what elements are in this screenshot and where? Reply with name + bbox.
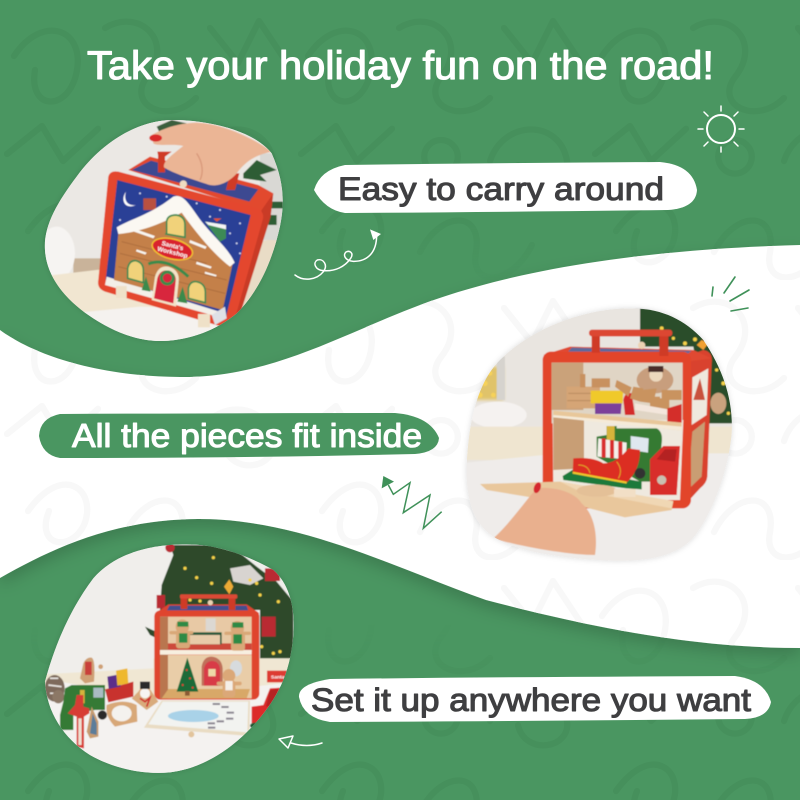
white wave band bbox=[0, 245, 800, 658]
handle posts bbox=[157, 152, 172, 172]
gingerbread bbox=[217, 669, 242, 697]
arrow: small white left arrow bbox=[279, 736, 322, 748]
ice rink board bbox=[144, 701, 250, 736]
santa figure bbox=[80, 658, 94, 683]
photo: closed carry case held by hand bbox=[44, 120, 284, 342]
icon: sun bbox=[698, 106, 744, 152]
arrow: curly white arrow bbox=[295, 229, 381, 279]
photo: open case with pieces stored inside bbox=[460, 300, 740, 570]
shelf bbox=[553, 410, 682, 427]
arrow: green zigzag arrow bbox=[382, 476, 442, 528]
red sleigh bbox=[252, 688, 282, 723]
hand bbox=[152, 123, 272, 185]
photo: set up with toys around bbox=[44, 544, 294, 774]
handle bbox=[592, 333, 668, 356]
case bbox=[155, 604, 259, 613]
case side bbox=[690, 350, 713, 498]
case side bbox=[235, 194, 274, 314]
case frame bbox=[544, 346, 698, 356]
photo: set up with toys around: Santa bbox=[271, 674, 285, 680]
lower train and sleigh bbox=[597, 426, 662, 482]
gingerbread house bbox=[114, 202, 233, 310]
upper shelf toys bbox=[567, 387, 600, 408]
toy train bbox=[60, 685, 105, 730]
penguin bbox=[87, 707, 98, 738]
pill: set it up anywhere you want bbox=[299, 676, 771, 722]
handle bbox=[181, 597, 235, 610]
tree bbox=[160, 545, 293, 658]
polar bear bbox=[106, 702, 137, 727]
pill: easy to carry around bbox=[314, 162, 697, 213]
pill: easy to carry around: Easy to carry around bbox=[338, 171, 664, 207]
pill: all the pieces fit inside: All the pieces fit inside bbox=[72, 417, 422, 454]
blue front bbox=[106, 180, 251, 317]
door and windows bbox=[202, 657, 223, 686]
table and snow bbox=[45, 658, 290, 696]
window top bbox=[166, 215, 185, 237]
photo: closed carry case held by hand: Workshop bbox=[157, 246, 188, 260]
fold-down board bbox=[480, 482, 673, 517]
pine cone bbox=[52, 690, 64, 703]
candy cane signpost bbox=[68, 695, 89, 748]
photo: closed carry case held by hand: Santa's bbox=[161, 240, 184, 252]
pill: all the pieces fit inside bbox=[39, 413, 439, 458]
small box on table bbox=[267, 671, 289, 682]
sign bbox=[151, 236, 194, 262]
window left bbox=[128, 261, 143, 283]
snowman bbox=[132, 688, 159, 710]
door bbox=[152, 266, 179, 307]
elves bbox=[169, 619, 193, 648]
hand bbox=[493, 488, 596, 555]
icon: green burst lines bbox=[712, 277, 749, 311]
mini tree bbox=[177, 658, 198, 692]
title: Take your holiday fun on the road! bbox=[87, 44, 714, 88]
window right bbox=[188, 282, 205, 303]
pill: set it up anywhere you want: Set it up anywhere you want bbox=[311, 682, 751, 718]
case top bbox=[128, 157, 273, 212]
